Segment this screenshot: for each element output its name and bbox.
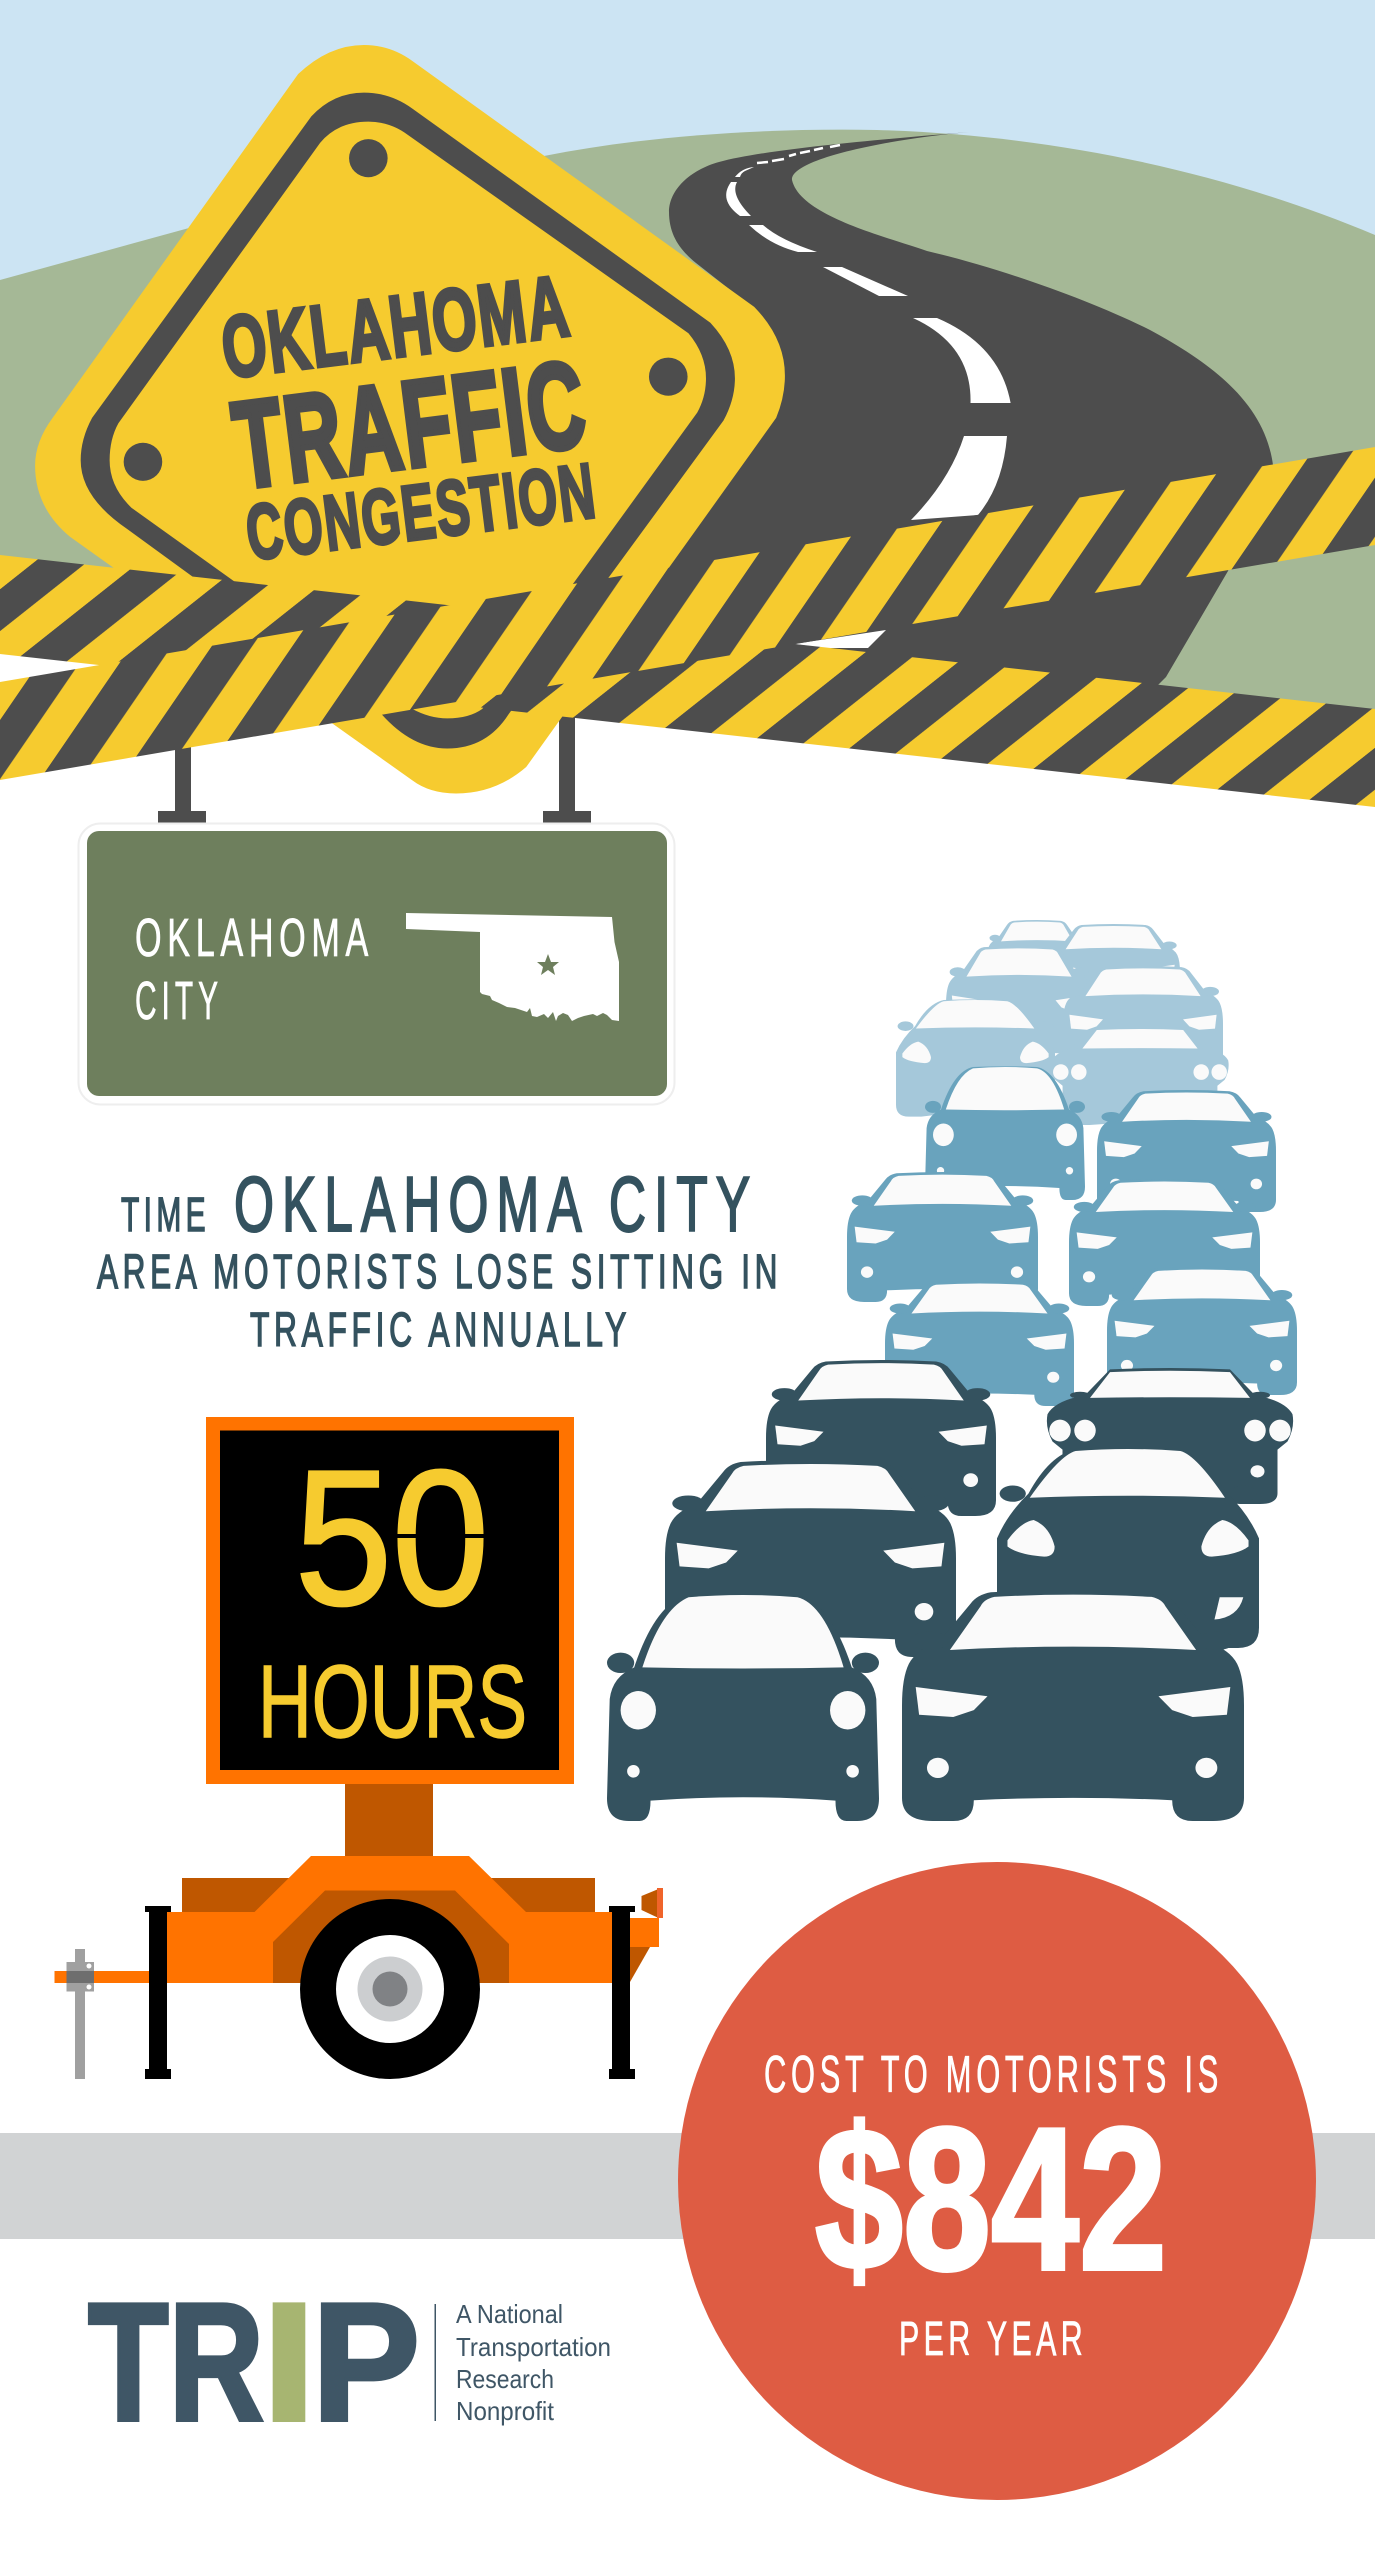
- heading: time lost in traffic: TRAFFIC ANNUALLY: [250, 1304, 631, 1357]
- caution tape long strip: [0, 555, 1375, 807]
- sign bolts: [124, 139, 688, 481]
- road band: [0, 2133, 1375, 2239]
- rear bracket and lamp: [630, 1888, 663, 1982]
- cost value: $842: [815, 2086, 1167, 2313]
- logo tagline: A National: [456, 2299, 563, 2329]
- near dark cars: [607, 1360, 1293, 1821]
- logo wordmark: [88, 2268, 420, 2456]
- sign label: [135, 908, 374, 1031]
- display value: 50: 50: [295, 1430, 489, 1645]
- left stabilizer: [145, 1906, 171, 2079]
- display unit: hours: HOURS: [258, 1644, 527, 1759]
- logo tagline: [456, 2299, 611, 2426]
- title: TRAFFIC: [226, 335, 594, 514]
- logo wordmark: I: [262, 2268, 316, 2456]
- heading: time lost in traffic: [97, 1160, 782, 1357]
- message board trailer: [54, 1417, 663, 2079]
- yellow diamond sign: [35, 45, 785, 793]
- heading: time lost in traffic: AREA MOTORISTS LOSE SITTING IN: [97, 1246, 782, 1299]
- message board mast: [345, 1784, 433, 1858]
- icon: Oklahoma state map: [406, 913, 619, 1021]
- icon: star: [537, 954, 559, 975]
- tow bar: [54, 1971, 150, 1983]
- green hills: [0, 130, 1375, 740]
- cost callout circle: [678, 1862, 1316, 2500]
- title: [216, 257, 601, 577]
- sign posts: [158, 690, 591, 823]
- white area below tape: [0, 600, 1375, 830]
- right stabilizer: [609, 1906, 635, 2079]
- distant light blue cars: [896, 920, 1229, 1125]
- TRIP logo: [88, 2268, 611, 2456]
- sky: [0, 0, 1375, 620]
- traffic jam cars: [607, 920, 1297, 1821]
- caution tape crossing strip: [0, 447, 1375, 780]
- cost period: PER YEAR: [899, 2313, 1087, 2366]
- title: OKLAHOMA: [216, 257, 576, 397]
- logo wordmark: P: [312, 2268, 420, 2456]
- heading: time lost in traffic: OKLAHOMA CITY: [234, 1160, 758, 1248]
- sign label: OKLAHOMA: [135, 908, 374, 968]
- sign label: CITY: [135, 971, 223, 1031]
- heading: time lost in traffic: TIME: [121, 1189, 210, 1242]
- sign inner border: [81, 93, 735, 749]
- title: CONGESTION: [241, 446, 601, 577]
- sign board: [35, 45, 785, 793]
- middle blue cars: [847, 1066, 1297, 1406]
- logo tagline: Nonprofit: [456, 2396, 555, 2426]
- logo wordmark: TR: [88, 2268, 264, 2456]
- winding road: [640, 132, 1273, 690]
- wheel arch: [273, 1890, 509, 1983]
- trailer rear deck: [182, 1878, 595, 1913]
- logo tagline: Research: [456, 2364, 554, 2394]
- message board: [206, 1417, 574, 1784]
- green highway sign: Oklahoma City: [78, 824, 674, 1104]
- wheel: [300, 1899, 480, 2079]
- trailer hitch jack: [66, 1949, 94, 2079]
- logo tagline: Transportation: [456, 2332, 611, 2362]
- road lane markings: [726, 145, 1011, 648]
- trailer body: [166, 1856, 614, 1983]
